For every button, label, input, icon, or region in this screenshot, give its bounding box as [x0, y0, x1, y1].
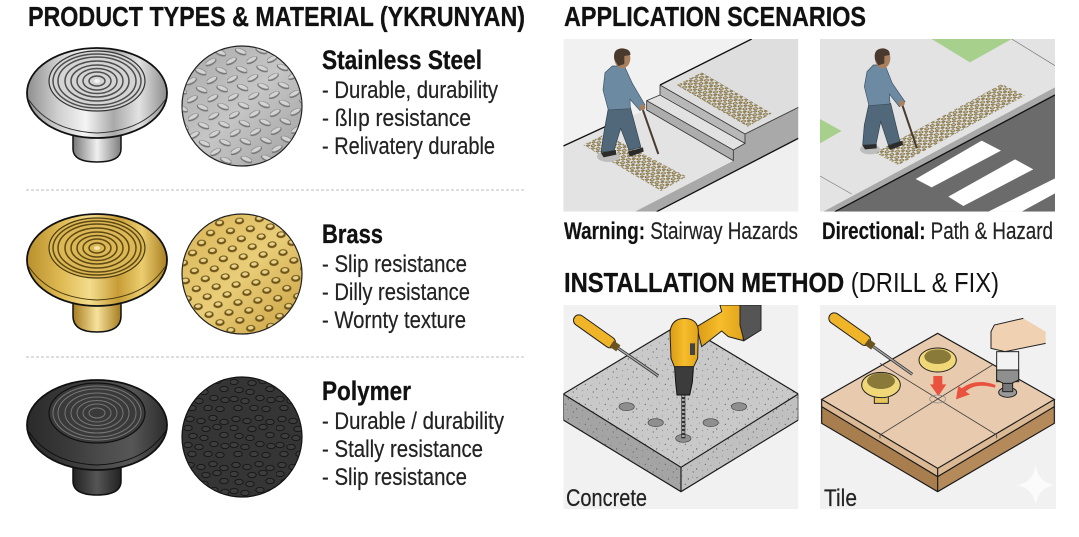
- text: stainless steel: - Durable, durability: [322, 77, 498, 104]
- caption: warning: Warning: Stairway Hazards: [564, 218, 798, 245]
- icon: polymer texture disc: [182, 377, 302, 497]
- text: brass: - Dilly resistance: [322, 279, 470, 306]
- text: polymer: [322, 376, 504, 491]
- icon: stud with stem: [862, 372, 900, 403]
- heading: application scenarios: APPLICATION SCENARIOS: [564, 1, 866, 32]
- icon: stud on tile: [919, 348, 956, 372]
- text: stainless steel: [322, 45, 498, 160]
- heading: product types and material: PRODUCT TYPES & MATERIAL (YKRUNYAN): [28, 1, 525, 32]
- text: stainless steel: Stainless Steel: [322, 45, 482, 75]
- illustration: concrete installation: [563, 305, 798, 509]
- text: stainless steel: - ßlıp resistance: [322, 105, 471, 132]
- arrow: curved: [956, 382, 996, 399]
- icon: stainless steel texture disc: [182, 46, 302, 166]
- text: brass: Brass: [322, 219, 383, 249]
- text: stainless steel: - Relivatery durable: [322, 133, 495, 160]
- text: brass: [322, 219, 470, 334]
- text: polymer: - Slip resistance: [322, 464, 467, 491]
- text: brass: - Wornty texture: [322, 307, 466, 334]
- icon: screwdriver: [834, 318, 912, 374]
- label: concrete: Concrete: [566, 485, 647, 512]
- illustration: warning stairway: [563, 39, 798, 212]
- watermark sparkle: [1018, 466, 1053, 504]
- arrow: down: [930, 376, 946, 396]
- label: tile: Tile: [824, 485, 857, 512]
- icon: brass texture disc: [182, 214, 302, 334]
- icon: screwdriver: [579, 320, 658, 376]
- illustration: directional path: [820, 39, 1055, 212]
- text: brass: - Slip resistance: [322, 251, 467, 278]
- text: polymer: Polymer: [322, 376, 411, 406]
- illustration: tile installation: [820, 305, 1056, 509]
- heading: installation method: INSTALLATION METHOD (DRILL & FIX): [564, 267, 999, 298]
- figure: person with cane: [597, 48, 658, 162]
- text: polymer: - Stally resistance: [322, 436, 483, 463]
- icon: polymer stud: [27, 380, 167, 495]
- icon: hammer and hand: [991, 318, 1046, 397]
- icon: brass stud: [27, 214, 167, 332]
- icon: stainless steel stud: [27, 48, 167, 162]
- text: polymer: - Durable / durability: [322, 408, 504, 435]
- icon: drill: [670, 305, 761, 438]
- figure: person with cane: [860, 48, 917, 154]
